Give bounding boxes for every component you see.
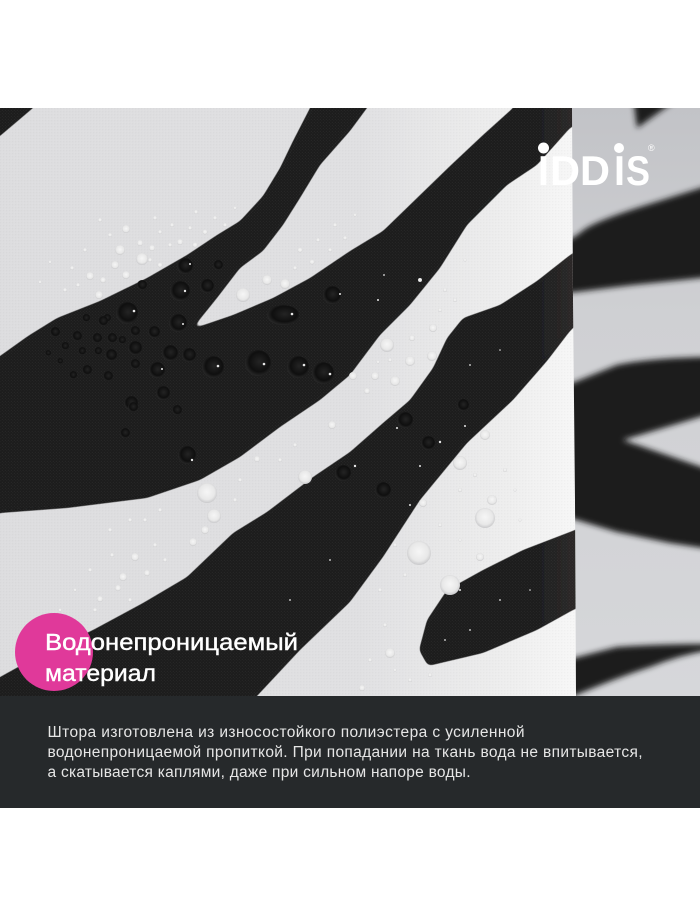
logo: IDDIS: ® [648,143,655,153]
stripe: large upper [0,108,572,514]
fabric weave texture [0,108,580,696]
stripe: large lower [0,253,574,696]
water droplets on white fabric [38,206,522,691]
water droplets on dark stripes [45,258,469,498]
description text [48,724,642,781]
logo: IDDIS: I [538,147,549,194]
logo: IDDIS [538,142,654,186]
foreground curtain with zebra stripes [0,108,576,696]
heading: материал [45,660,156,686]
logo: IDDIS: D [580,147,610,194]
stripe: top-left corner [0,108,33,136]
heading: Водонепроницаемый [45,629,298,655]
pink accent circle [15,613,93,691]
logo: IDDIS: D [550,147,580,194]
blurred background curtain [572,108,700,696]
logo: IDDIS: I [614,147,625,194]
description text: водонепроницаемой пропиткой. При попадании на ткань вода не впитывается, [48,744,642,761]
droplet highlights on dark stripes [133,263,531,641]
heading [45,629,298,686]
dark description band [0,696,700,808]
description text: а скатывается каплями, даже при сильном напоре воды. [48,764,470,781]
description text: Штора изготовлена из износостойкого полиэстера с усиленной [48,724,524,741]
logo: IDDIS: S [626,147,650,194]
stripe: small blob [420,530,576,666]
photo: zebra shower curtain [0,90,700,720]
